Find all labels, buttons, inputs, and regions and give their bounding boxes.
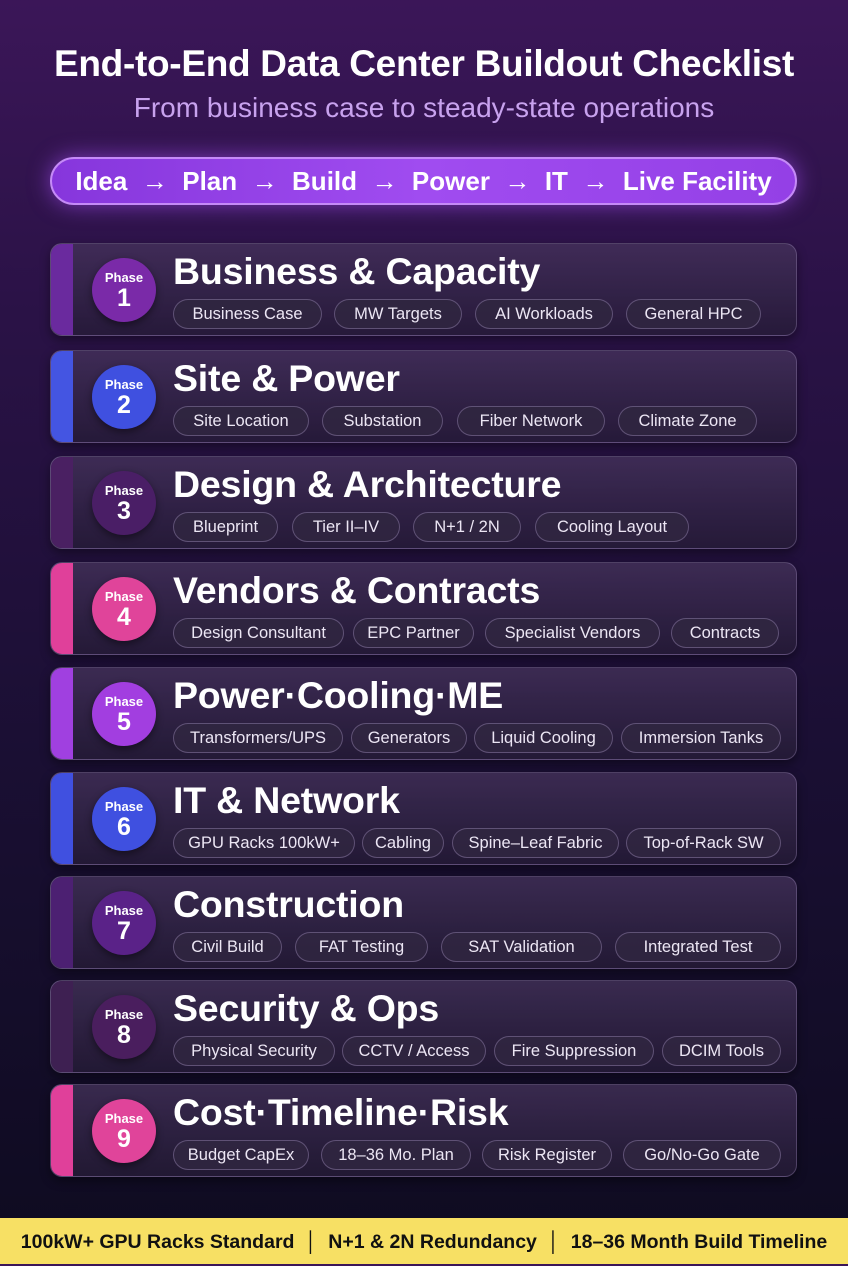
tags 1 [173,299,761,329]
panel: phase 9: 18–36 Mo. Plan [338,1146,454,1164]
badge 2: 2 [117,391,131,419]
panel: phase 4: Specialist Vendors [505,624,640,642]
panel: phase 5: Generators [368,729,450,747]
panel: phase 2: Site Location [193,412,289,430]
badge 9: 9 [117,1125,131,1153]
badge 7: 7 [117,917,131,945]
panel: phase 7: Civil Build [191,938,264,956]
panel: phase 8: DCIM Tools [679,1042,764,1060]
heading 2: Site & Power [173,357,400,399]
badge 7 [92,891,156,955]
heading 5: Power·Cooling·ME [173,674,503,716]
panel: phase 9: Risk Register [498,1146,596,1164]
badge 1 [92,258,156,322]
badge 9: Phase [105,1111,143,1126]
badge 3 [92,471,156,535]
panel: phase 3: N+1 / 2N [434,518,500,536]
panel: phase 1: General HPC [644,305,743,323]
badge 9 [92,1099,156,1163]
panel: phase 5: Liquid Cooling [491,729,596,747]
badge 1: Phase [105,270,143,285]
panel: phase 8: Physical Security [191,1042,317,1060]
title: End-to-End Data Center Buildout Checklist [54,43,794,84]
panel: phase 5: Immersion Tanks [639,729,763,747]
flow pill [50,157,797,205]
panel: phase 6: Spine–Leaf Fabric [469,834,602,852]
badge 7: Phase [105,903,143,918]
tags 8 [173,1036,781,1066]
heading 1: Business & Capacity [173,250,540,292]
subtitle: From business case to steady-state operations [134,92,714,123]
badge 4: Phase [105,589,143,604]
heading 4: Vendors & Contracts [173,569,540,611]
badge 3: Phase [105,483,143,498]
panel: phase 6: Top-of-Rack SW [643,834,764,852]
badge 8: 8 [117,1021,131,1049]
panel: phase 7: FAT Testing [319,938,404,956]
panel: phase 1: AI Workloads [495,305,593,323]
panel: phase 7: Integrated Test [644,938,752,956]
panel: phase 4: Design Consultant [191,624,326,642]
panel: phase 2: Substation [344,412,421,430]
panel: phase 8: CCTV / Access [359,1042,469,1060]
panel: phase 5: Transformers/UPS [190,729,326,747]
panel: phase 5 [50,667,797,760]
panel: phase 9: Go/No-Go Gate [644,1146,760,1164]
tags 7 [173,932,781,962]
badge 6 [92,787,156,851]
panel: phase 9: Budget CapEx [188,1146,294,1164]
tags 4 [173,618,779,648]
panel: phase 4: Contracts [690,624,760,642]
panel: phase 1: Business Case [192,305,303,323]
panel: phase 4: EPC Partner [367,624,460,642]
panel: phase 9 [50,1084,797,1177]
panel: phase 3: Cooling Layout [557,518,667,536]
panel: phase 8: Fire Suppression [512,1042,636,1060]
panel: phase 8 [50,980,797,1073]
tags 6 [173,828,781,858]
panel: phase 6: Cabling [375,834,431,852]
badge 1: 1 [117,284,131,312]
badge 6: Phase [105,799,143,814]
badge 5: Phase [105,694,143,709]
panel: phase 2 [50,350,797,443]
panel: phase 3 [50,456,797,549]
panel: phase 6: GPU Racks 100kW+ [188,834,340,852]
heading 9: Cost·Timeline·Risk [173,1091,508,1133]
badge 5 [92,682,156,746]
badge 8 [92,995,156,1059]
footer banner: 100kW+ GPU Racks Standard │ N+1 & 2N Redundancy │ 18–36 Month Build Timeline [21,1231,827,1253]
badge 8: Phase [105,1007,143,1022]
heading 6: IT & Network [173,779,400,821]
tags 3 [173,512,689,542]
badge 2 [92,365,156,429]
panel: phase 3: Tier II–IV [313,518,379,536]
flow pill: Idea → Plan → Build → Power → IT → Live Facility [75,166,772,196]
heading 3: Design & Architecture [173,463,561,505]
badge 3: 3 [117,497,131,525]
tags 5 [173,723,781,753]
badge 6: 6 [117,813,131,841]
heading 7: Construction [173,883,404,925]
panel: phase 3: Blueprint [193,518,258,536]
badge 2: Phase [105,377,143,392]
panel: phase 4 [50,562,797,655]
footer banner [0,1218,848,1264]
panel: phase 2: Climate Zone [638,412,737,430]
panel: phase 7: SAT Validation [468,938,575,956]
heading 8: Security & Ops [173,987,439,1029]
badge 4 [92,577,156,641]
panel: phase 2: Fiber Network [480,412,582,430]
panel: phase 1: MW Targets [354,305,442,323]
tags 9 [173,1140,781,1170]
badge 5: 5 [117,708,131,736]
panel: phase 7 [50,876,797,969]
badge 4: 4 [117,603,131,631]
panel: phase 1 [50,243,797,336]
tags 2 [173,406,757,436]
panel: phase 6 [50,772,797,865]
